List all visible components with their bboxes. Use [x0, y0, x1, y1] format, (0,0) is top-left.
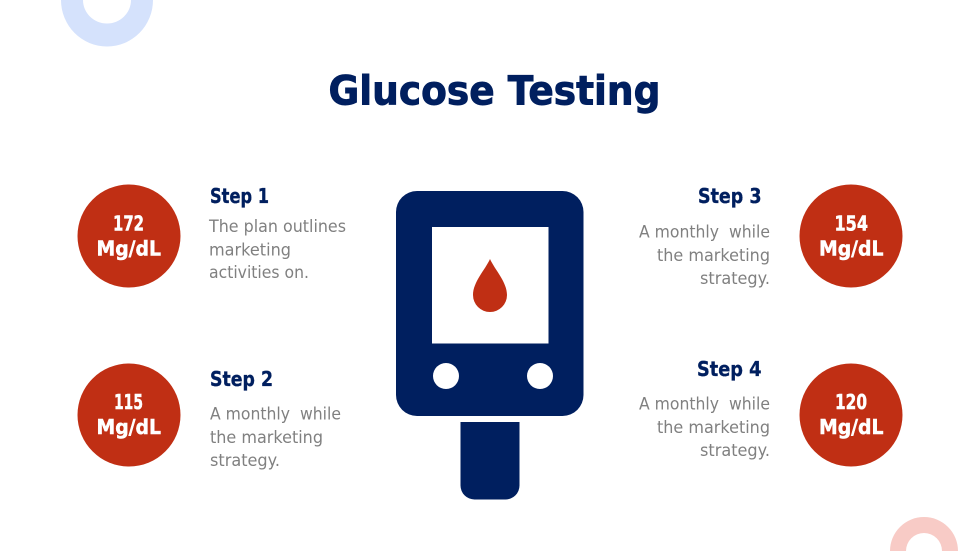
step 3 description [639, 222, 770, 289]
step 4 description: strategy. [700, 441, 770, 461]
test strip [460, 422, 520, 500]
reading badge: 120 Mg/dL: 120 [835, 390, 867, 414]
decorative ring: top left [61, 0, 153, 46]
step 1 description: marketing [209, 240, 291, 260]
meter body [396, 191, 584, 416]
step 2 description: strategy. [210, 451, 280, 471]
step 1 description: The plan outlines [208, 217, 346, 237]
title: Glucose Testing [328, 66, 660, 114]
reading badge: 115 Mg/dL: 115 [114, 390, 143, 414]
reading badge: 154 Mg/dL [800, 184, 902, 288]
step 3 description: strategy. [700, 269, 770, 289]
step 3 heading: Step 3 [698, 184, 762, 208]
panel: step 3 [639, 184, 902, 289]
step 4 description: the marketing [657, 418, 770, 438]
icon: blood drop [473, 259, 507, 312]
step 2 description: the marketing [210, 428, 323, 448]
reading badge: 115 Mg/dL: Mg/dL [96, 415, 161, 439]
step 1 description: activities on. [209, 263, 309, 283]
meter right button [527, 363, 553, 389]
meter screen [432, 227, 548, 344]
step 4 description [639, 394, 770, 461]
step 3 description: the marketing [657, 246, 770, 266]
panel: step 4 [639, 357, 902, 466]
step 4 description: A monthly while [639, 394, 770, 414]
meter left button [433, 363, 459, 389]
step 1 description [208, 217, 346, 283]
step 3 description: A monthly while [639, 222, 770, 242]
decorative ring: bottom right [890, 517, 958, 551]
reading badge: 172 Mg/dL: 172 [113, 212, 144, 236]
reading badge: 120 Mg/dL: Mg/dL [819, 415, 884, 439]
reading badge: 115 Mg/dL [78, 364, 180, 466]
reading badge: 172 Mg/dL: Mg/dL [96, 236, 161, 260]
icon: glucose meter [396, 191, 584, 500]
panel: step 2 [78, 364, 341, 471]
reading badge: 154 Mg/dL: Mg/dL [819, 236, 884, 260]
step 1 heading: Step 1 [210, 184, 269, 208]
step 4 heading: Step 4 [697, 357, 762, 381]
reading badge: 120 Mg/dL [800, 364, 902, 466]
reading badge: 154 Mg/dL: 154 [834, 212, 868, 236]
step 2 description [210, 404, 341, 471]
panel: step 1 [78, 184, 346, 288]
step 2 description: A monthly while [210, 404, 341, 424]
step 2 heading: Step 2 [210, 367, 273, 391]
reading badge: 172 Mg/dL [78, 184, 180, 288]
